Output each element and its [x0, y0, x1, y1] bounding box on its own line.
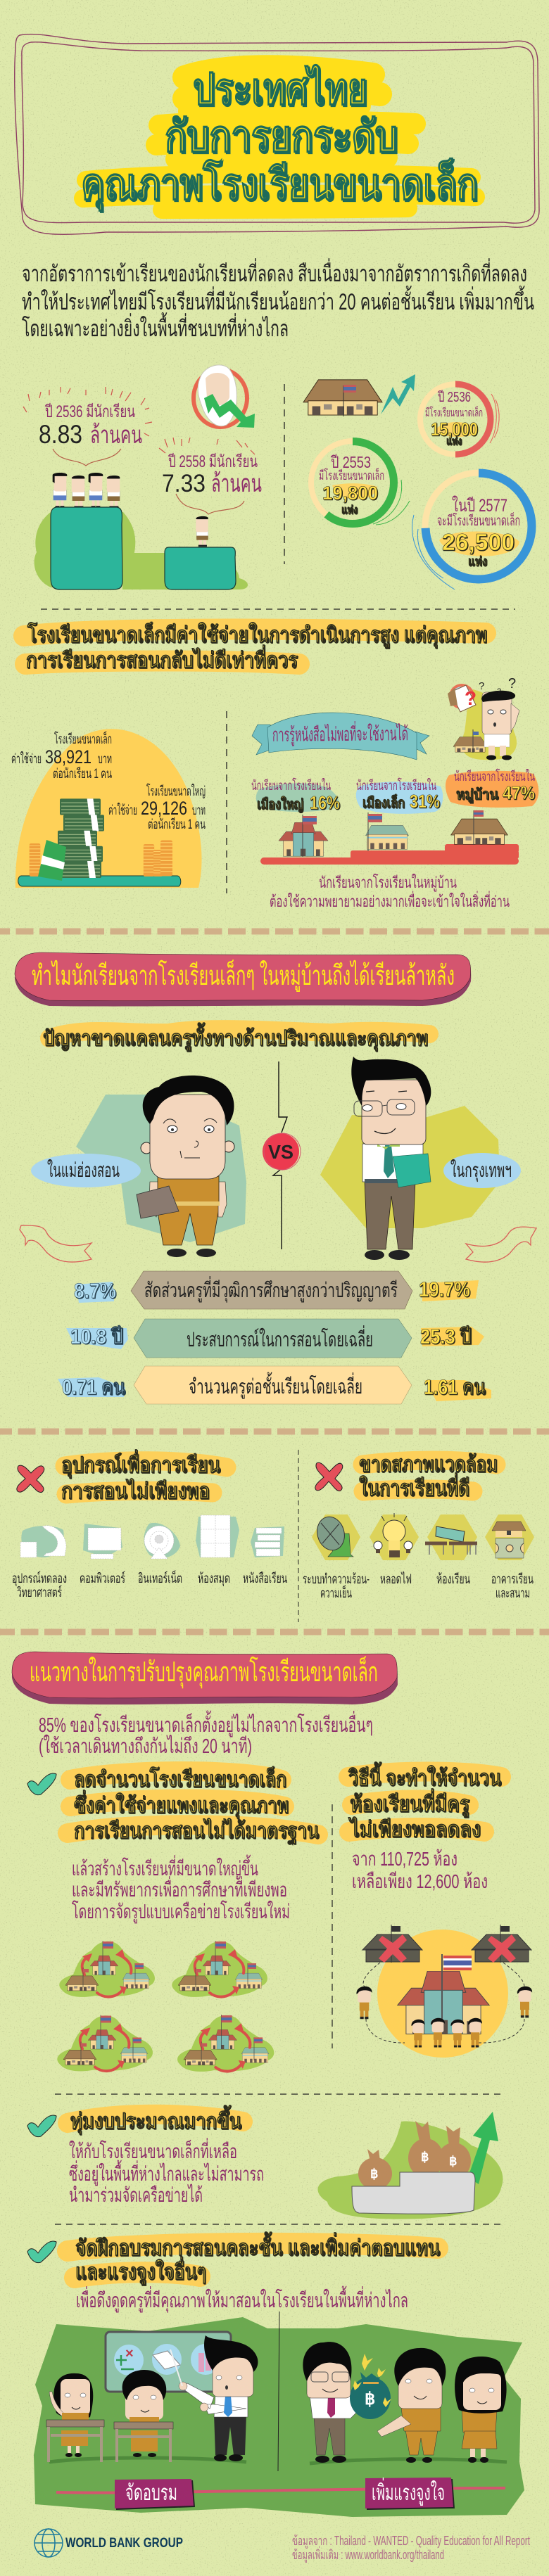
stat: big city 16%: เมืองใหญ่: [257, 796, 303, 812]
title frame: [15, 34, 539, 234]
logo: World Bank Group: [34, 2529, 183, 2557]
label: Bangkok: [443, 1153, 521, 1188]
environment labels: หลอดไฟ: [380, 1571, 412, 1587]
teal blob: [76, 1095, 246, 1242]
heading: ห้องเรียนที่มีครู: [350, 1788, 469, 1818]
heading: ขาดสภาพแวดล้อม: [359, 1452, 498, 1477]
stat: small city 31%: [356, 777, 443, 814]
environment labels: ห้องเรียน: [436, 1571, 470, 1587]
room numbers: เหลือเพียง 12,600 ห้อง: [352, 1870, 488, 1892]
source credits: ข้อมูลเพิ่มเติม : www.worldbank.org/thailand: [292, 2546, 444, 2563]
text: 2536 students: 8.83: [39, 420, 82, 449]
heading: cost and quality: [24, 621, 487, 672]
ring 2553: แห่ง: [341, 504, 358, 516]
row: teachers per class: [58, 1366, 491, 1404]
text: 2558 students: 7.33: [162, 470, 206, 497]
vertical dash divider: [284, 384, 285, 564]
stat: small city 31%: นักเรียนจากโรงเรียนใน: [356, 777, 436, 793]
male student at desk: [114, 2370, 173, 2462]
text: large school cost: บาท: [192, 803, 206, 818]
stat: big city 16%: 16%: [310, 792, 340, 813]
body text: แล้วสร้างโรงเรียนที่มีขนาดใหญ่ขึ้น: [72, 1854, 258, 1880]
text: small school cost: ต่อนักเรียน 1 คน: [53, 766, 112, 782]
equipment labels: วิทยาศาสตร์: [17, 1585, 62, 1600]
heading text: [26, 621, 487, 672]
ring 2536: แห่ง: [446, 435, 462, 447]
icon: school and field: [492, 1522, 526, 1558]
row: qualification: สัดส่วนครูที่มีวุฒิการศึกษาสูงกว่าปริญญาตรี: [144, 1276, 398, 1303]
icon: red cross: [315, 1462, 343, 1491]
library: [201, 1515, 230, 1557]
vs badge: [263, 1133, 301, 1170]
heading: จัดฝึกอบรมการสอนคละชั้น และเพิ่มค่าตอบแทน: [75, 2231, 440, 2260]
ring 2577: 26,500: [442, 529, 515, 555]
title text: ประเทศไทย: [193, 64, 367, 114]
icon: baby with falling arrow: [194, 365, 255, 428]
text: 85% nearby: [39, 1710, 373, 1758]
heading: ไม่เพียงพอลดลง: [348, 1816, 481, 1842]
vs badge: VS: [268, 1141, 294, 1163]
literacy caption: [270, 874, 510, 910]
row: qualification: [74, 1271, 479, 1309]
teal blobs: [21, 1517, 284, 1558]
8.7 blob: [76, 1282, 114, 1303]
stat: village 47%: หมู่บ้าน: [456, 786, 498, 804]
text: small school cost: บาท: [98, 752, 112, 767]
text: 2536 students: [39, 402, 142, 449]
stat: small city 31%: เมืองเล็ก: [362, 793, 405, 811]
four students on column: [53, 473, 120, 508]
1.61 blob: [425, 1380, 491, 1401]
25.3 blob: [421, 1327, 484, 1346]
environment labels: ระบบทำความร้อน-: [303, 1572, 370, 1587]
illustration: money bags on steps: ฿: [449, 2154, 457, 2168]
banner text: การรู้หนังสือไม่พอที่จะใช้งานได้: [272, 720, 408, 746]
text: large school cost: 29,126: [141, 798, 187, 819]
chalkboard: [106, 2332, 231, 2392]
room numbers: [352, 1848, 488, 1892]
logo: World Bank Group: WORLD BANK GROUP: [65, 2536, 183, 2551]
equipment labels: อินเทอร์เน็ต: [138, 1569, 182, 1586]
label: Bangkok: ในกรุงเทพฯ: [450, 1159, 512, 1182]
year 2536 sunburst: [23, 387, 152, 436]
1.61 value: 1.61 คน: [424, 1376, 486, 1399]
icon: fan: [313, 1514, 353, 1557]
podium steps: [260, 844, 519, 865]
internet: [144, 1526, 174, 1559]
banner ribbon: [252, 713, 429, 760]
panel: classroom reduction: [348, 1761, 532, 2058]
literacy caption: นักเรียนจากโรงเรียนในหมู่บ้าน: [319, 874, 457, 892]
text: large school cost: โรงเรียนขนาดใหญ่: [146, 783, 206, 799]
right teacher: [351, 1057, 431, 1260]
heading: ซึ่งค่าใช้จ่ายแพงและคุณภาพ: [74, 1790, 289, 1819]
heading: ทุ่มงบประมาณมากขึ้น: [70, 2105, 241, 2135]
icon: stacks of money: [30, 798, 104, 881]
text: 2536 students: ปี 2536 มีนักเรียน: [44, 402, 135, 421]
check mark: [27, 2241, 56, 2263]
text: 85% nearby: (ใช้เวลาเดินทางถึงกันไม่ถึง 20 นาที): [39, 1734, 252, 1758]
panel: cost per student: [11, 729, 206, 888]
heading: [68, 2105, 243, 2135]
character: confused boy: ?: [497, 687, 501, 696]
equipment labels: อุปกรณ์ทดลอง: [12, 1571, 67, 1587]
text: small school cost: 38,921: [45, 746, 92, 767]
19.7 blob: [422, 1280, 479, 1301]
equipment icons: [20, 1515, 284, 1559]
title text: [81, 64, 478, 211]
body text: ให้กับโรงเรียนขนาดเล็กที่เหลือ: [69, 2138, 237, 2162]
text: large school cost: [108, 783, 206, 832]
classroom group: [46, 2335, 258, 2462]
ribbon ornaments: [20, 1225, 536, 1262]
source credits: [292, 2534, 530, 2563]
microscope and tools: [20, 1526, 66, 1557]
character: confused boy: ?: [479, 680, 484, 692]
icon: red cross: [17, 1465, 44, 1493]
left teacher: [137, 1076, 234, 1257]
panel: student numbers falling: [23, 365, 262, 589]
pointing teacher: [170, 2335, 258, 2461]
text: small school cost: โรงเรียนขนาดเล็ก: [54, 730, 112, 747]
callout curve 2558: [176, 494, 244, 514]
body text: [69, 2138, 264, 2206]
heading text: การเรียนการสอนกลับไม่ดีเท่าที่ควร: [26, 644, 298, 672]
panel: teacher comparison: [20, 1057, 536, 1262]
incentive group: [303, 2342, 507, 2463]
title panel: [15, 34, 539, 234]
icon: classroom: [425, 1526, 477, 1555]
heading: ในการเรียนที่ดี: [359, 1472, 469, 1500]
column 2558: [165, 547, 236, 589]
body text: นำมาร่วมจัดเครือข่ายได้: [69, 2184, 203, 2206]
computer: [88, 1528, 121, 1559]
25.3 value: 25.3 ปี: [420, 1325, 472, 1348]
callout curve 2536: [53, 449, 121, 466]
label: training: จัดอบรม: [125, 2480, 177, 2505]
stat: big city 16%: [251, 777, 340, 813]
text: large school cost: ค่าใช้จ่าย: [108, 803, 137, 818]
label: incentive: เพิ่มแรงจูงใจ: [372, 2478, 445, 2506]
panel: merge schools: [27, 1766, 319, 2072]
panel: small school counts: [303, 374, 532, 589]
money bag reward: [350, 2354, 391, 2419]
subheading: teacher shortage: [43, 1022, 429, 1052]
yellow dome: [15, 729, 202, 888]
stat: village 47%: [446, 768, 538, 808]
10.8 blob: [66, 1328, 128, 1349]
green ground blobs: [34, 512, 248, 589]
section banner: why behind: [15, 952, 471, 1007]
year 2558 sunburst: [159, 438, 255, 454]
title text: กับการยกระดับ: [165, 113, 398, 161]
title yellow brush: [83, 67, 476, 210]
equipment labels: [12, 1569, 287, 1600]
text: 2536 students: ล้านคน: [90, 421, 142, 449]
head teacher: [303, 2342, 359, 2463]
icon: stacks of coins: [144, 840, 172, 876]
big school: [398, 1954, 489, 2034]
text: 2558 students: [162, 452, 262, 497]
ring 2553: 19,800: [322, 483, 378, 504]
panel: literacy: [251, 676, 538, 910]
illustration: money bags on steps: ฿: [421, 2150, 429, 2164]
ring 2553: ปี 2553: [330, 453, 371, 471]
text: 2558 students: ล้านคน: [211, 470, 262, 497]
ring 2553: [311, 441, 410, 525]
heading brush: [24, 629, 486, 664]
single student: [196, 516, 208, 547]
school clusters: [57, 1941, 274, 2072]
panel: training and incentive: [27, 2231, 524, 2517]
illustration: money bags on steps: [317, 2112, 503, 2219]
heading: [359, 1452, 498, 1500]
male teacher receiving: [377, 2348, 446, 2463]
panel: more budget: [27, 2105, 503, 2219]
dashed links: [363, 1963, 524, 2043]
text: small school cost: [11, 730, 112, 782]
ring 2577: แห่ง: [468, 554, 487, 568]
text: large school cost: ต่อนักเรียน 1 คน: [148, 817, 206, 832]
heading: [68, 2231, 440, 2285]
body text: และมีทรัพยากรเพื่อการศึกษาที่เพียงพอ: [72, 1876, 287, 1901]
8.7 value: 8.7%: [74, 1280, 116, 1303]
green scene backdrop: [34, 2317, 524, 2517]
olive blob: [320, 1106, 500, 1228]
check mark: [27, 1773, 56, 1795]
label: Mae Hong Son: [31, 1154, 141, 1187]
text: 85% nearby: 85% ของโรงเรียนขนาดเล็กตั้งอยู่ไม่ไกลจากโรงเรียนอื่นๆ: [39, 1710, 373, 1737]
money bag reward: ฿: [365, 2390, 375, 2409]
check mark: [27, 2115, 56, 2137]
ring 2536: 15,000: [431, 419, 478, 440]
ring 2577: ในปี 2577: [452, 495, 507, 516]
heading: [348, 1761, 501, 1842]
0.71 value: 0.71 คน: [62, 1376, 125, 1399]
column 2536: [51, 507, 122, 589]
heading: การสอนไม่เพียงพอ: [61, 1478, 210, 1503]
connector line: [56, 2488, 505, 2493]
heading: [61, 1449, 227, 1503]
stat: small city 31%: 31%: [410, 791, 440, 812]
ring 2536: ปี 2536: [438, 390, 471, 405]
body text: ซึ่งอยู่ในพื้นที่ห่างไกลและไม่สามารถ: [69, 2160, 264, 2186]
intro text: [22, 258, 534, 341]
versus lightning divider: [273, 1061, 287, 1249]
body text: โดยการจัดรูปแบบเครือข่ายโรงเรียนใหม่: [72, 1900, 290, 1924]
0.71 blob: [58, 1377, 125, 1397]
equipment labels: คอมพิวเตอร์: [80, 1571, 125, 1586]
row: teachers per class: จำนวนครูต่อชั้นเรียนโดยเฉลี่ย: [189, 1372, 362, 1399]
heading: การเรียนการสอนไม่ได้มาตรฐาน: [74, 1818, 319, 1845]
subheading: teacher shortage: ปัญหาขาดแคลนครูทั้งทางด้านปริมาณและคุณภาพ: [43, 1022, 428, 1052]
room numbers: จาก 110,725 ห้อง: [352, 1848, 458, 1870]
base: [18, 876, 181, 886]
heading: [68, 1766, 319, 1845]
19.7 value: 19.7%: [419, 1278, 470, 1301]
10.8 value: 10.8 ปี: [70, 1325, 123, 1348]
panel: insufficient equipment: [12, 1449, 287, 1600]
icon: school with rising arrow: [303, 374, 415, 416]
schools on podium: [279, 810, 507, 857]
yellow backdrop: [377, 1930, 508, 2058]
body text: [72, 1854, 290, 1924]
female teacher: [455, 2357, 507, 2463]
character: confused boy: ?: [465, 687, 477, 709]
chalkboard: ×: [125, 2346, 134, 2361]
environment hexagons: [312, 1515, 534, 1560]
scene divider: [278, 2312, 279, 2471]
intro text: โดยเฉพาะอย่างยิ่งในพื้นที่ชนบทที่ห่างไกล: [22, 312, 289, 341]
ring 2577: [412, 473, 532, 589]
stat: village 47%: 47%: [503, 782, 535, 803]
teachers: [356, 1987, 532, 2048]
panel: poor environment: [303, 1452, 534, 1601]
label: training: [115, 2479, 195, 2510]
heading: ลดจำนวนโรงเรียนขนาดเล็ก: [74, 1766, 286, 1792]
ring 2536: มีโรงเรียนขนาดเล็ก: [425, 405, 483, 419]
heading: วิธีนี้ จะทำให้จำนวน: [348, 1761, 501, 1790]
stat: big city 16%: นักเรียนจากโรงเรียนใน: [251, 777, 331, 793]
illustration: money bags on steps: ฿: [370, 2167, 378, 2181]
books: [255, 1528, 282, 1556]
heading: และแรงจูงใจอื่นๆ: [75, 2256, 206, 2285]
equipment labels: ห้องสมุด: [198, 1571, 230, 1587]
environment labels: ความเย็น: [320, 1584, 352, 1601]
icon: bulbs: [374, 1513, 412, 1557]
text: 2558 students: ปี 2558 มีนักเรียน: [168, 452, 258, 471]
environment labels: [303, 1571, 534, 1601]
female student at desk: [46, 2373, 104, 2462]
ring 2553: มีโรงเรียนขนาดเล็ก: [319, 467, 384, 483]
row: experience: ประสบการณ์ในการสอนโดยเฉลี่ย: [187, 1325, 373, 1351]
closed schools with crosses: [362, 1925, 531, 1963]
row: experience: [66, 1319, 484, 1358]
ring 2536: [420, 384, 499, 454]
heading: อุปกรณ์เพื่อการเรียน: [61, 1449, 220, 1479]
label: Mae Hong Son: ในแม่ฮ่องสอน: [47, 1159, 120, 1181]
character: confused boy: [448, 676, 519, 760]
equipment labels: หนังสือเรียน: [243, 1571, 287, 1586]
text: small school cost: ค่าใช้จ่าย: [11, 751, 42, 767]
section banner: solutions: [12, 1652, 398, 1704]
character: confused boy: ?: [508, 676, 516, 691]
label: incentive: [365, 2478, 455, 2510]
